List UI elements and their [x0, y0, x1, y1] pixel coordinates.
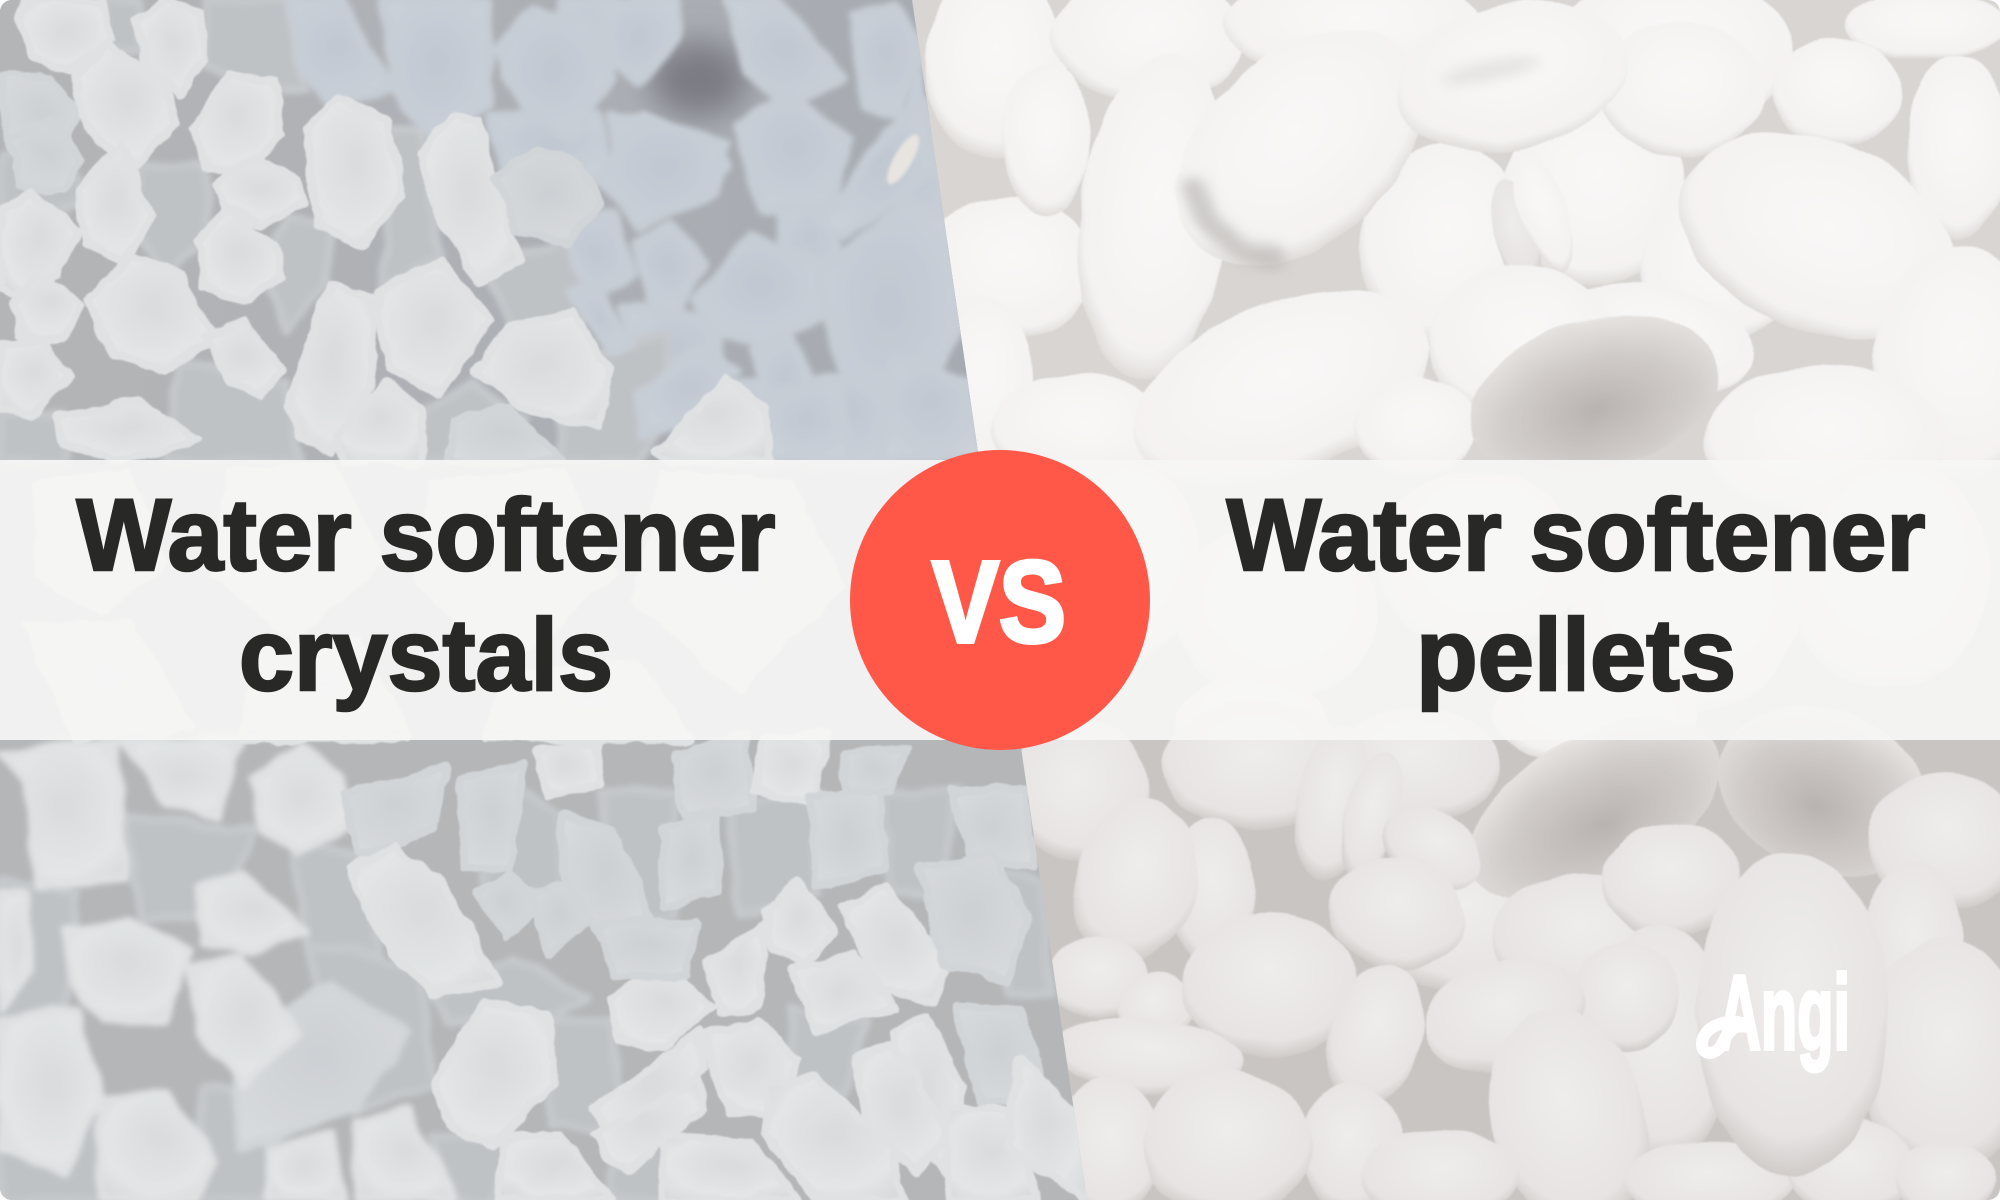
blurred crystals, lower left	[0, 740, 453, 1200]
photo: water softener crystals	[0, 0, 1100, 1200]
pellets, behind band	[1506, 740, 1572, 758]
heading: water softener crystals: crystals	[239, 598, 613, 712]
heading: water softener crystals	[76, 478, 776, 712]
filler crystals, upper	[0, 0, 950, 462]
sharp crystals, lower right	[344, 733, 1087, 1200]
logo: Angi: Angi	[1718, 954, 1850, 1072]
photo: water softener pellets	[900, 0, 2000, 1200]
heading: water softener pellets: pellets	[1416, 598, 1736, 712]
logo: Angi	[1696, 970, 1847, 1074]
blurred crystals, far upper right	[287, 0, 982, 462]
vs badge: VS	[932, 537, 1066, 667]
pellets, lower half	[1022, 740, 2000, 1200]
filler crystals, lower	[0, 778, 1052, 1200]
crystals, behind band	[72, 740, 695, 748]
title band	[0, 460, 2000, 740]
pellets, upper half	[924, 0, 2000, 460]
vs badge	[850, 450, 1150, 750]
heading: water softener crystals: Water softener	[76, 478, 776, 592]
sharp crystals, upper left	[0, 0, 772, 462]
heading: water softener pellets: Water softener	[1226, 478, 1926, 592]
heading: water softener pellets	[1226, 478, 1926, 712]
